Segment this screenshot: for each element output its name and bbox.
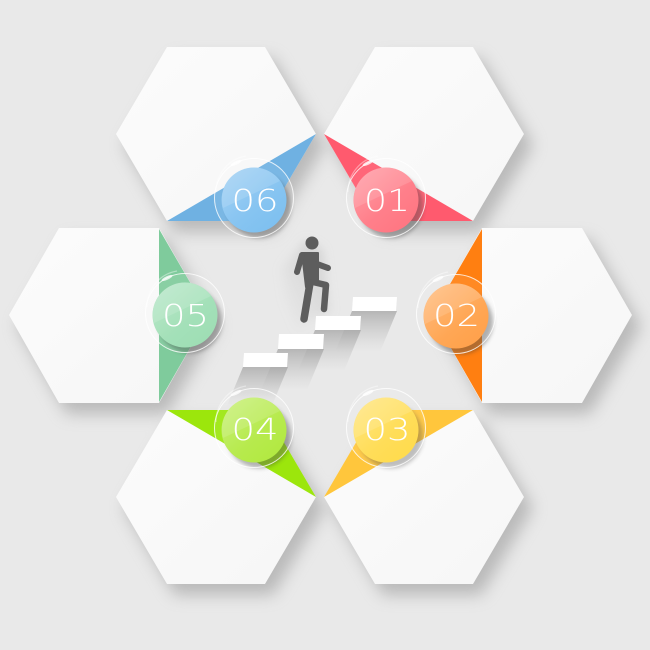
badge: 01: 01 [364, 184, 410, 219]
badge: 01 [346, 156, 426, 238]
triangle: 01 red [324, 134, 473, 221]
panel: hexagon 05 [9, 228, 209, 403]
stair 2 [278, 334, 324, 349]
panel: hexagon 06 [116, 47, 316, 221]
badge: 06 [214, 156, 294, 238]
panel: hexagon 02 [432, 228, 632, 403]
badge: 03: 03 [364, 413, 410, 448]
triangle: 03 yellow [324, 410, 473, 497]
badge: 04 [214, 386, 294, 468]
badge: 02 [416, 272, 496, 354]
panel: hexagon 04 [116, 410, 316, 584]
triangle: 06 blue [167, 134, 316, 221]
panel: hexagon 01 [324, 47, 524, 221]
triangle: 02 orange [432, 229, 482, 402]
badge: 04: 04 [232, 413, 278, 448]
stairs and walking person [226, 236, 397, 408]
stair 4 [352, 297, 397, 311]
stair 1 [243, 353, 288, 367]
triangle: 05 mint [159, 229, 209, 402]
hexagon shadows [17, 58, 641, 595]
triangle: 04 green [167, 410, 316, 497]
person [297, 236, 328, 319]
badge: 05: 05 [162, 299, 209, 334]
badge: 05 [146, 271, 224, 353]
stair 3 [315, 316, 361, 330]
badge: 06: 06 [232, 184, 278, 219]
stair shadows [226, 311, 397, 408]
badge: 02: 02 [433, 299, 480, 334]
person shadow [282, 240, 330, 330]
panel: hexagon 03 [324, 410, 524, 584]
badge: 03 [346, 386, 426, 468]
